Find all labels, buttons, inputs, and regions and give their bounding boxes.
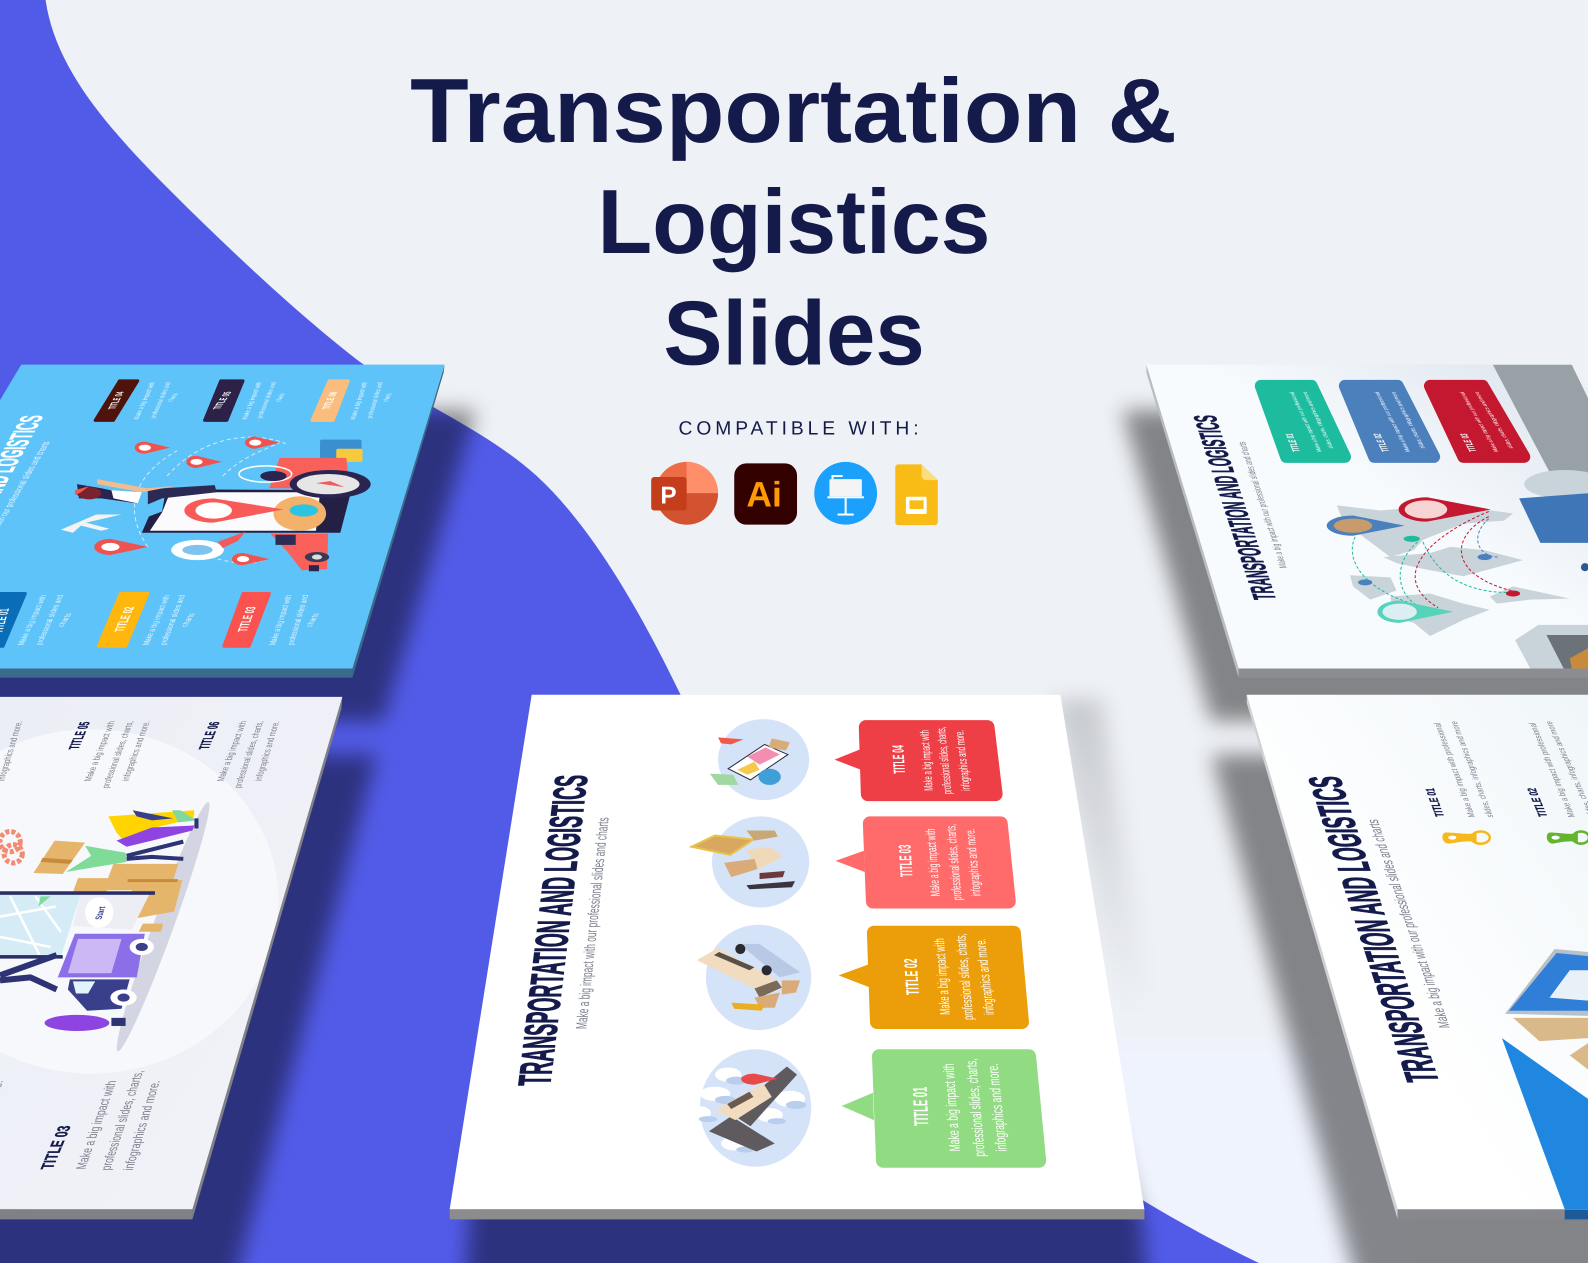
icon: Illustrator — [734, 463, 797, 525]
badge descriptions: professional slides and — [286, 595, 311, 645]
badge descriptions: Make a big impact with — [349, 382, 369, 419]
panel: center slide: Make a big impact with our professional slides and charts — [574, 817, 613, 1029]
icon: Keynote — [814, 462, 877, 525]
badge descriptions — [16, 382, 394, 645]
text blocks: TITLE 06 — [197, 721, 224, 749]
slide content: bottom-right: Make a big impact with our professional slides and charts — [1365, 819, 1455, 1028]
text blocks: infographics and more. — [122, 1081, 164, 1170]
badge cards — [1261, 386, 1524, 457]
slide content: top-left — [0, 381, 394, 646]
text blocks: Make a big impact with — [83, 721, 118, 781]
panel: top-right slide — [1146, 365, 1588, 678]
callout: title 02 — [839, 933, 1022, 1022]
text blocks: professional slides, charts, — [99, 1071, 147, 1170]
panel: center slide — [450, 695, 1144, 1219]
warehouse blue box and dome — [1519, 470, 1588, 571]
badge text: TITLE 03 — [1458, 433, 1480, 452]
shadow: bottom-left slide — [0, 755, 377, 1263]
illustration: delivery van and phone map: Start — [94, 906, 108, 920]
badge text — [1284, 392, 1515, 452]
world map with route pins — [1327, 497, 1570, 636]
badge descriptions: Make a big impact with — [268, 595, 294, 645]
badge descriptions: charts — [305, 613, 322, 627]
callout: title 04: professional slides, charts, — [935, 727, 955, 794]
item: title 01: TITLE 01 — [1424, 788, 1448, 817]
panel: top-left blue slide — [0, 365, 445, 678]
item: title 02: TITLE 02 — [1525, 788, 1551, 817]
badge descriptions: Make a big impact with — [133, 382, 157, 419]
illustration circle: title 04 — [710, 719, 809, 800]
icon: PowerPoint — [651, 462, 718, 525]
callout: title 04: TITLE 04 — [890, 745, 910, 774]
title: Logistics — [598, 172, 990, 273]
slide title: TRANSPORTATION AND LOGISTICS — [1190, 415, 1285, 600]
shadow: top-left slide — [0, 410, 476, 721]
badge text: slides, charts, infographics and more — [1390, 392, 1427, 448]
callout: title 03: TITLE 03 — [897, 844, 918, 877]
badge descriptions: charts — [382, 393, 394, 402]
badge descriptions: charts — [274, 393, 287, 402]
title: Slides — [663, 284, 925, 385]
callout: title 04: Make a big impact with — [919, 730, 936, 791]
illustration: laptop, boxes and blue panel — [1502, 949, 1588, 1209]
badge text: TITLE 01 — [1284, 433, 1303, 452]
item: title 02 — [1525, 721, 1588, 844]
item: title 01: slides, charts, infographics and more — [1449, 721, 1496, 817]
text blocks — [0, 721, 282, 1170]
callout: title 03: professional slides, charts, — [944, 824, 966, 900]
badges — [0, 381, 348, 646]
badge descriptions: professional slides and — [159, 595, 188, 645]
badge descriptions: professional slides and — [35, 595, 66, 645]
callout: title 02: professional slides, charts, — [954, 933, 978, 1020]
callout: title 02: infographics and more. — [974, 938, 998, 1015]
panel: bottom-left slide — [0, 697, 342, 1219]
slide content: top-right: Make a big impact with our professional slides and charts — [1237, 442, 1290, 568]
badge labels: TITLE 03 — [236, 606, 260, 632]
illustration circle: title 03 — [692, 816, 809, 907]
panel: bottom-right slide — [1247, 695, 1588, 1219]
slide title: TRANSPORTATION AND LOGISTICS — [1303, 776, 1453, 1083]
badge descriptions: charts — [56, 613, 74, 627]
item: title 01: Make a big impact with professional — [1433, 723, 1478, 817]
callout: title 01: professional slides, charts, — [964, 1058, 990, 1157]
badge descriptions: Make a big impact with — [241, 382, 264, 419]
badge descriptions: Make a big impact with — [141, 595, 173, 645]
text blocks: Make a big impact with — [74, 1081, 121, 1169]
callout: title 01 — [842, 1056, 1039, 1161]
badge labels — [0, 392, 340, 633]
icon: Illustrator: Ai — [746, 475, 782, 515]
badge text: slides, charts, infographics and more — [1473, 392, 1515, 448]
callout: title 04: infographics and more. — [953, 730, 974, 791]
text blocks: Make a big impact with — [216, 721, 249, 781]
slide content: bottom-left — [0, 721, 282, 1170]
text blocks: TITLE 03 — [39, 1125, 76, 1169]
badge descriptions: professional slides and — [149, 382, 173, 418]
illustration: delivery van and phone map — [0, 799, 218, 1055]
callout: title 03: infographics and more. — [964, 828, 985, 896]
shadow: center slide right glow — [1053, 699, 1149, 1013]
text blocks: TITLE 05 — [67, 721, 94, 749]
callout: title 01: TITLE 01 — [910, 1086, 934, 1126]
title — [410, 61, 1177, 385]
shadow: center slide — [464, 1134, 1148, 1263]
slide content: top-right — [1190, 365, 1588, 668]
badge text: Make a big impact with our professional — [1459, 392, 1500, 452]
slide title: TRANSPORTATION AND LOGISTICS — [513, 774, 601, 1086]
gray wall block — [1493, 364, 1588, 472]
badge text: Make a big impact with our professional — [1373, 392, 1412, 452]
item: title 02: Make a big impact with professional — [1528, 723, 1578, 817]
illustration circle: title 02 — [697, 925, 811, 1030]
shadow: bottom-right slide — [1211, 755, 1588, 1263]
shadow: top-right slide — [1122, 410, 1588, 721]
callout: title 02: TITLE 02 — [902, 958, 925, 995]
badge text: Make a big impact with our professional — [1288, 392, 1323, 452]
badge labels: TITLE 02 — [113, 606, 138, 632]
badge labels: TITLE 06 — [321, 392, 340, 409]
warehouse door — [1515, 625, 1588, 668]
callout: title 01: Make a big impact with — [941, 1063, 965, 1152]
slide content: bottom-right — [1303, 721, 1588, 1209]
icon: Google Slides — [895, 464, 938, 525]
item: title 01 — [1424, 721, 1496, 844]
icon: PowerPoint: P — [660, 482, 677, 509]
callout: title 02: Make a big impact with — [933, 938, 954, 1015]
compatible with label: COMPATIBLE WITH: — [679, 418, 919, 440]
badge descriptions: charts — [166, 393, 180, 402]
text blocks: infographics and more. — [254, 721, 282, 781]
text blocks: professional slides, charts, — [101, 721, 136, 788]
soft circle backdrop — [0, 729, 279, 1074]
title: Transportation & — [410, 61, 1177, 162]
callout: title 01: infographics and more. — [985, 1063, 1011, 1152]
badge descriptions: professional slides and — [256, 382, 278, 418]
badge labels: TITLE 04 — [107, 392, 127, 409]
badge descriptions: charts — [180, 613, 198, 627]
text blocks: professional slides, charts, — [233, 721, 266, 788]
illustration circle: title 01 — [685, 1049, 811, 1167]
blue curved background shape — [0, 0, 1259, 1263]
badge descriptions: professional slides and — [366, 382, 385, 418]
callout: title 03: Make a big impact with — [924, 828, 944, 896]
text blocks: infographics and more. — [121, 721, 153, 781]
badge labels: TITLE 05 — [212, 392, 235, 409]
lavender wash lower right — [1114, 1023, 1418, 1263]
callout: title 04 — [835, 727, 996, 794]
badge text: slides, charts, infographics and more — [1302, 392, 1335, 448]
badge text: TITLE 02 — [1372, 433, 1392, 452]
illustration: delivery truck, phone and map pins — [61, 437, 371, 571]
callout: title 03 — [836, 823, 1009, 901]
badge descriptions: Make a big impact with — [16, 595, 49, 645]
